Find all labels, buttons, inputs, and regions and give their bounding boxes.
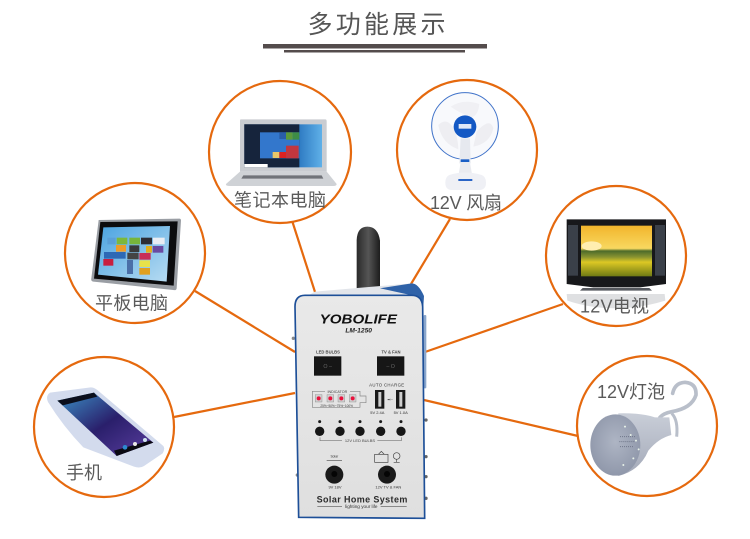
switches: TV & FAN xyxy=(382,350,400,355)
tv and fan output xyxy=(375,451,401,490)
battery indicator: 25%~50%~75%~100% xyxy=(320,404,353,408)
panel: laptop xyxy=(209,81,351,223)
icon: tablet xyxy=(91,219,181,290)
solar input: Solar xyxy=(330,454,339,458)
front panel xyxy=(295,295,425,518)
panel: solar home system unit xyxy=(292,227,428,518)
side studs xyxy=(292,315,428,500)
label: fan: 12V 风扇 xyxy=(430,193,502,213)
icon: bulb xyxy=(590,382,696,476)
switches: – O xyxy=(386,364,395,370)
battery indicator xyxy=(312,390,366,408)
led bulb sockets xyxy=(315,420,406,443)
panel: bulb xyxy=(577,356,717,496)
title underline xyxy=(263,44,487,52)
icon: carry handle xyxy=(357,227,380,292)
icon: laptop xyxy=(226,119,337,186)
panel: fan xyxy=(397,80,537,220)
unit top xyxy=(300,283,424,300)
icon: tv xyxy=(567,219,666,308)
system name: Solar Home System xyxy=(317,494,407,504)
panel: tv xyxy=(546,186,686,326)
switches: LED BULBS xyxy=(316,350,340,355)
title: 多功能展示 xyxy=(308,11,446,39)
label: bulb: 12V灯泡 xyxy=(597,382,665,402)
icon: phone xyxy=(47,387,164,468)
panel: tablet xyxy=(65,183,205,323)
led bulb sockets: 12V LED BULBS xyxy=(345,438,375,443)
unit top blue edge xyxy=(380,283,424,307)
label: phone: 手机 xyxy=(66,463,102,483)
panel: phone xyxy=(34,357,174,497)
label: tablet: 平板电脑 xyxy=(95,294,168,314)
model: LM-1250 xyxy=(345,328,372,335)
tagline: lighting your life xyxy=(345,504,378,509)
solar input xyxy=(325,454,343,490)
usb ports: 5V 1.0A xyxy=(394,410,408,415)
usb ports: AUTO CHARGE xyxy=(369,383,404,388)
label: tv: 12V电视 xyxy=(580,296,649,316)
connector lines xyxy=(174,219,578,436)
tv and fan output: 12V TV & FAN xyxy=(375,485,401,490)
icon: fan xyxy=(432,93,498,190)
switches: O – xyxy=(323,364,332,370)
usb ports: 5V 2.4A xyxy=(370,410,385,415)
switches xyxy=(314,350,404,376)
usb ports: ▪⇠ xyxy=(387,397,393,402)
solar input: 9V 18V xyxy=(328,485,342,490)
brand: YOBOLIFE xyxy=(320,311,398,326)
usb ports xyxy=(369,383,408,415)
label: laptop: 笔记本电脑 xyxy=(234,190,326,210)
battery indicator: INDICATOR xyxy=(327,390,348,394)
tagline xyxy=(317,504,407,509)
